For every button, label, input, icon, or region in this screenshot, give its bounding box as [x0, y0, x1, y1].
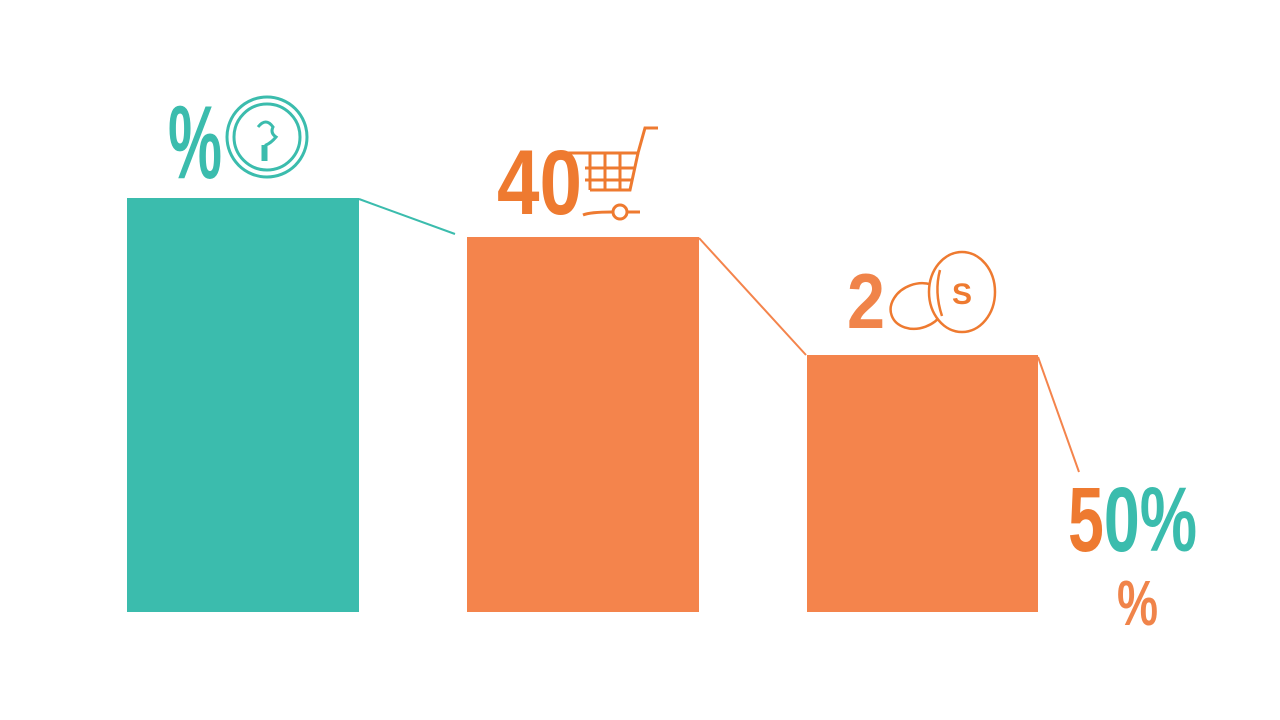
bar 2 orange — [467, 237, 699, 612]
label 1: percent: % — [168, 85, 222, 201]
label 3: 2: 2 — [847, 257, 885, 345]
connector line 3 — [1038, 357, 1079, 472]
label 2: 40: 40 — [497, 132, 582, 234]
icon: coin — [227, 97, 307, 177]
icon: cart — [560, 128, 658, 219]
label 4: 50%: 50% — [1068, 469, 1197, 571]
connector line 2 — [699, 238, 806, 355]
label 4b: percent: % — [1117, 567, 1158, 639]
bar 1 teal — [127, 198, 359, 612]
bar 3 orange — [807, 355, 1038, 612]
connector line 1 — [359, 199, 455, 234]
icon: coins: S — [952, 278, 972, 311]
icon: coins — [884, 252, 995, 336]
